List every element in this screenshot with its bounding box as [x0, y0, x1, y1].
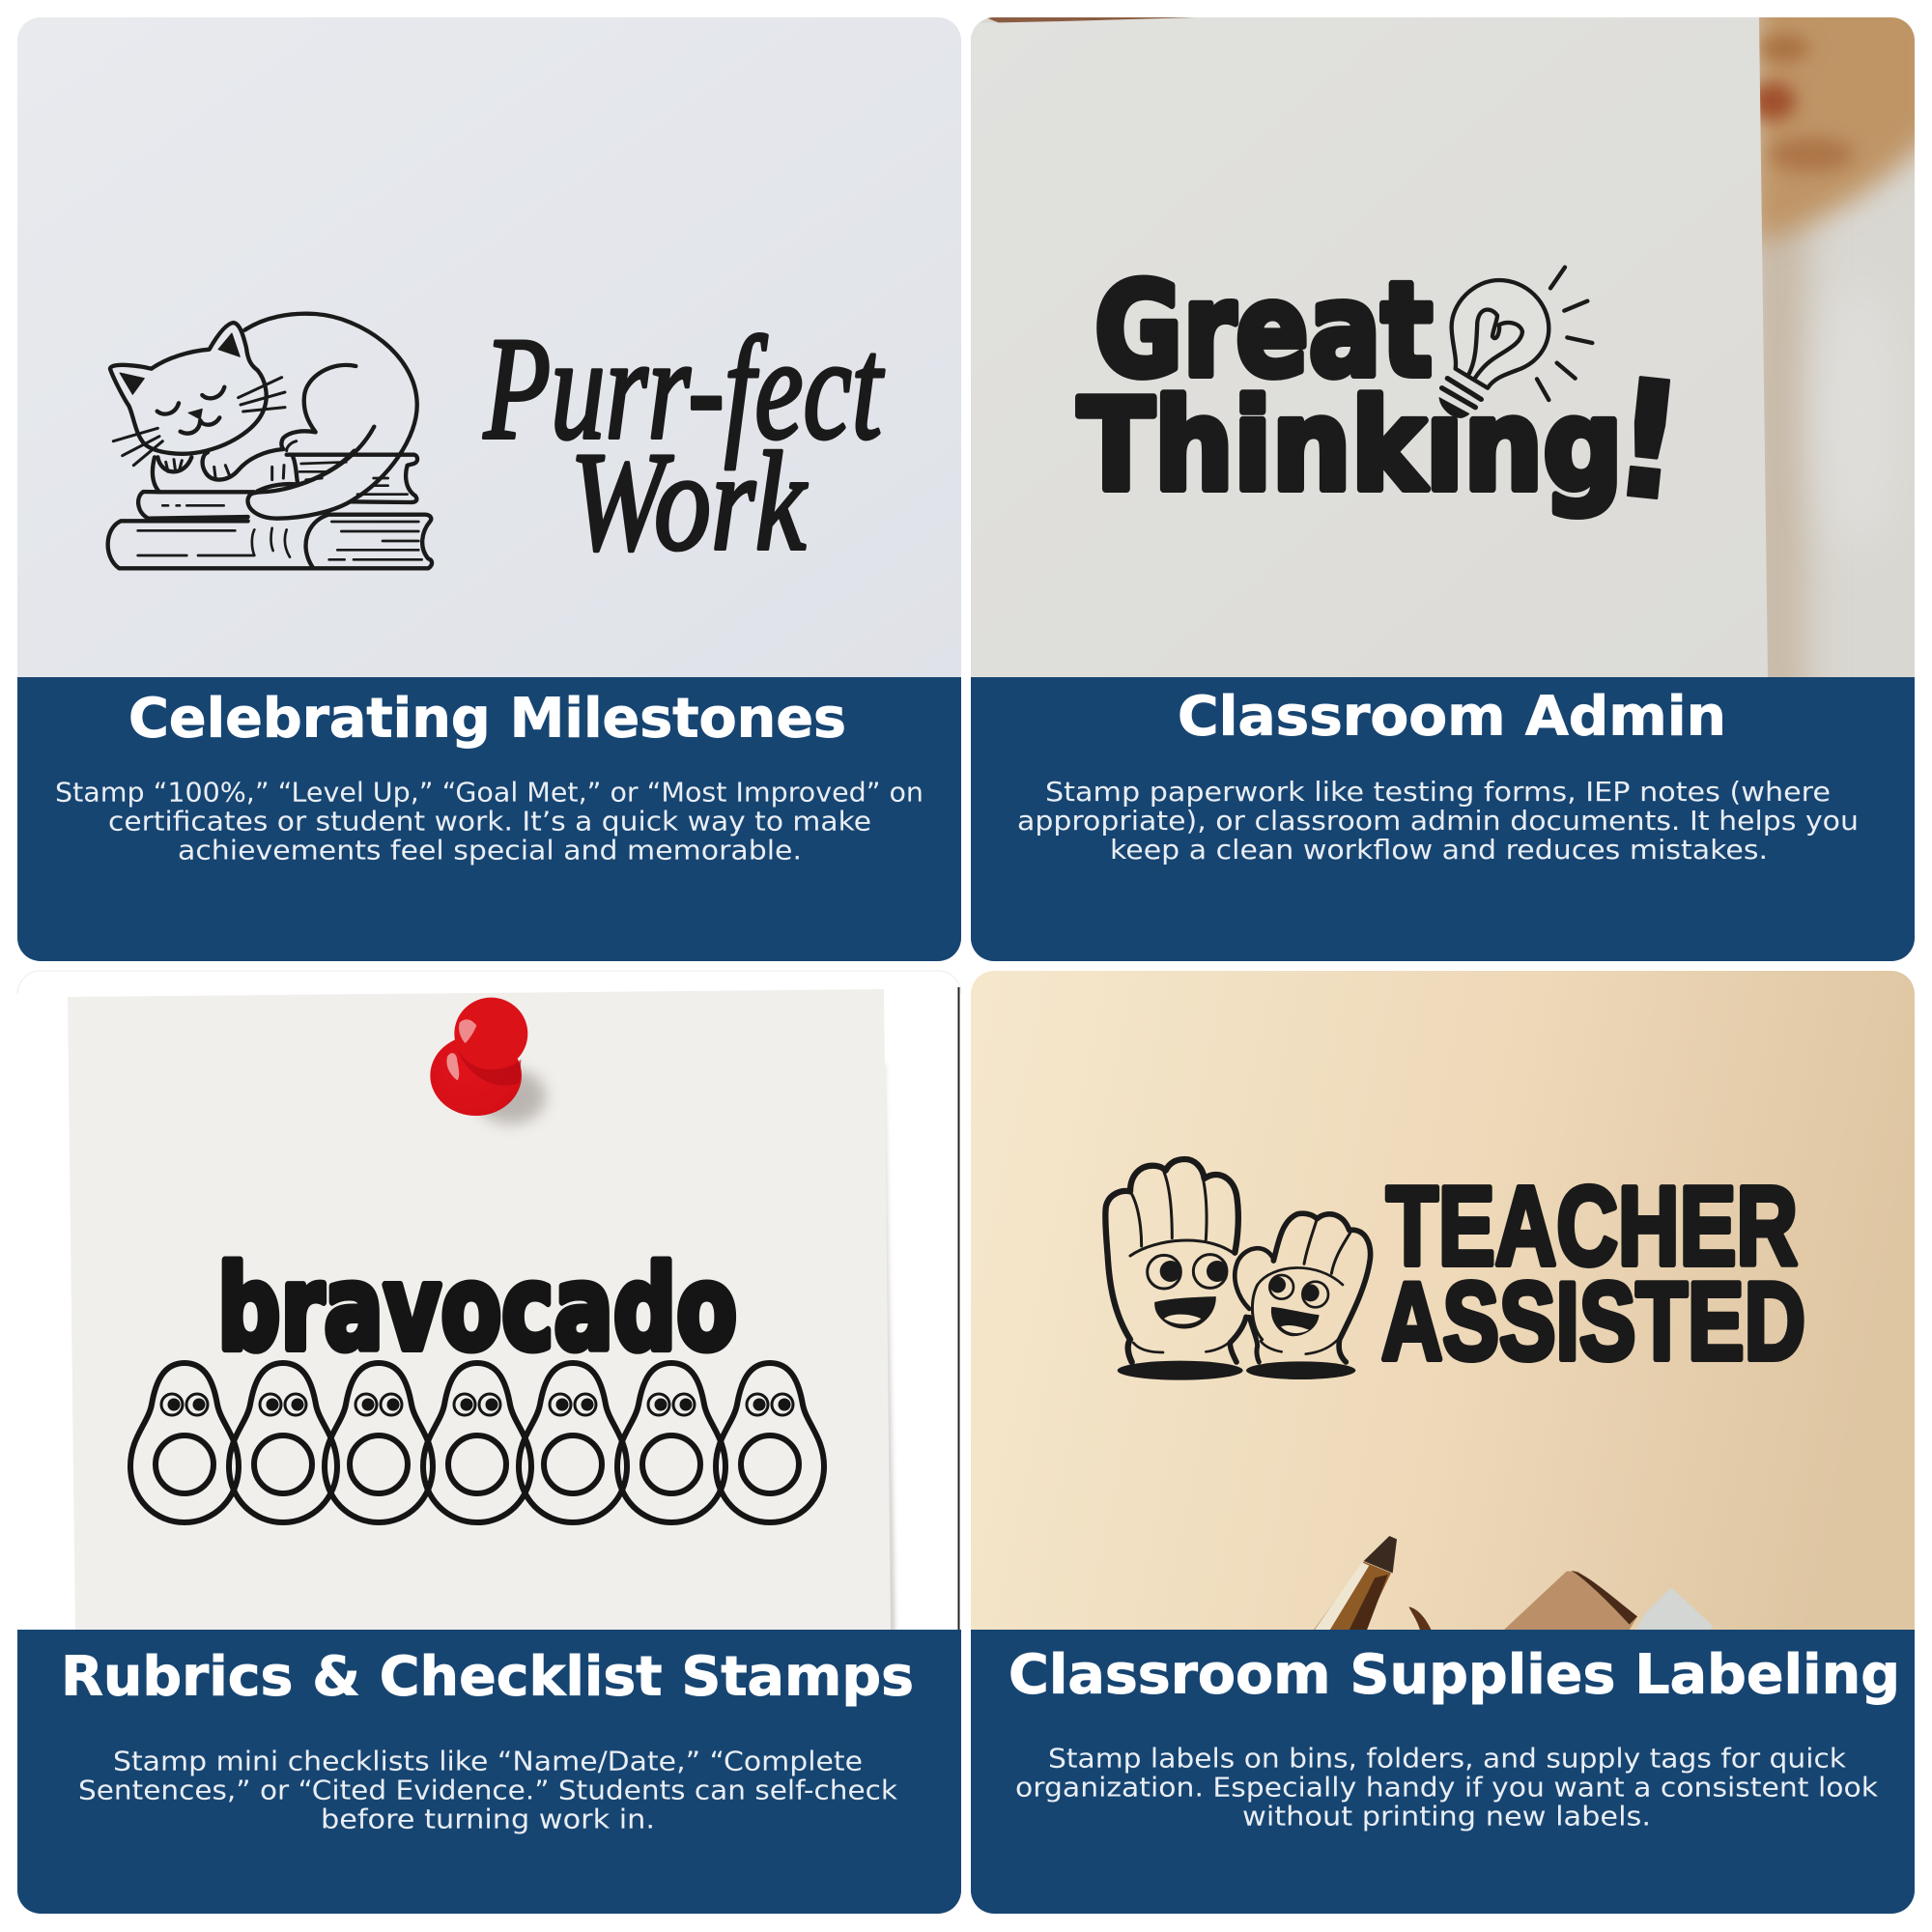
- body text: [55, 777, 923, 866]
- stamp text: Purr-fect Work: Purr-fect: [483, 307, 885, 469]
- body text: without printing new labels.: [1242, 1801, 1651, 1832]
- caption band: [971, 1630, 1915, 1914]
- stamp text: Purr-fect Work: [481, 332, 886, 553]
- body text: achievements feel special and memorable.: [178, 835, 802, 866]
- photo: pinned paper note: [68, 987, 960, 1633]
- panel: rubrics and checklist stamps: [17, 971, 961, 1914]
- body text: Stamp paperwork like testing forms, IEP notes (where: [1045, 776, 1831, 808]
- body text: certificates or student work. It’s a quick way to make: [108, 806, 871, 837]
- photo: tan wall: [971, 971, 1915, 1630]
- stamp text: bravocado: bravocado: [217, 1242, 737, 1377]
- body text: keep a clean workflow and reduces mistakes.: [1110, 834, 1768, 866]
- panel: classroom admin: [971, 0, 1932, 961]
- icon: red push pin: [430, 998, 546, 1123]
- stamp text: Great Thinking!: Great: [1094, 255, 1433, 406]
- stamp text: Great Thinking!: !: [1602, 343, 1695, 539]
- photo: top edge sliver: [987, 17, 1194, 23]
- illustration: row of avocados: [130, 1363, 824, 1522]
- body text: organization. Especially handy if you want a consistent look: [1015, 1772, 1879, 1803]
- heading: Classroom Supplies Labeling: [1009, 1644, 1900, 1706]
- heading: Rubrics & Checklist Stamps: [61, 1646, 914, 1708]
- heading: Classroom Admin: [1178, 686, 1726, 748]
- body text: [1017, 776, 1859, 866]
- stamp text: Purr-fect Work: Work: [570, 423, 808, 580]
- panel: classroom supplies labeling: [971, 971, 1915, 1914]
- body text: [78, 1745, 898, 1835]
- body text: Stamp “100%,” “Level Up,” “Goal Met,” or “Most Improved” on: [55, 777, 923, 808]
- photo: wall behind the card: [971, 0, 1932, 715]
- stamp text: TEACHER ASSISTED: ASSISTED: [1381, 1261, 1805, 1383]
- body text: [1015, 1743, 1879, 1832]
- body text: before turning work in.: [321, 1803, 655, 1835]
- stamp text: TEACHER ASSISTED: TEACHER: [1386, 1163, 1798, 1289]
- illustration: sleeping cat on books: [108, 314, 432, 568]
- caption band: [17, 1630, 961, 1914]
- photo: paper card: [971, 17, 1768, 677]
- stamp text: Great Thinking!: [1075, 274, 1671, 520]
- caption band: [17, 677, 961, 961]
- icon: light bulb: [1439, 268, 1592, 417]
- body text: appropriate), or classroom admin documents. It helps you: [1017, 805, 1859, 837]
- panel: celebrating milestones: [17, 17, 961, 961]
- stamp text: TEACHER ASSISTED: [1381, 1182, 1804, 1363]
- heading: Celebrating Milestones: [128, 688, 846, 750]
- photo: pale paper background: [17, 17, 961, 677]
- illustration: waving hands: [1105, 1159, 1371, 1380]
- photo: pen, tape and paper: [1314, 1536, 1713, 1630]
- caption band: [971, 677, 1915, 961]
- card outline: rubrics panel top edge: [17, 971, 961, 994]
- body text: Stamp labels on bins, folders, and supply tags for quick: [1048, 1743, 1847, 1774]
- body text: Sentences,” or “Cited Evidence.” Students can self-check: [78, 1774, 898, 1806]
- stamp text: Great Thinking!: Thinkıng: [1078, 372, 1623, 519]
- body text: Stamp mini checklists like “Name/Date,” “Complete: [113, 1745, 863, 1777]
